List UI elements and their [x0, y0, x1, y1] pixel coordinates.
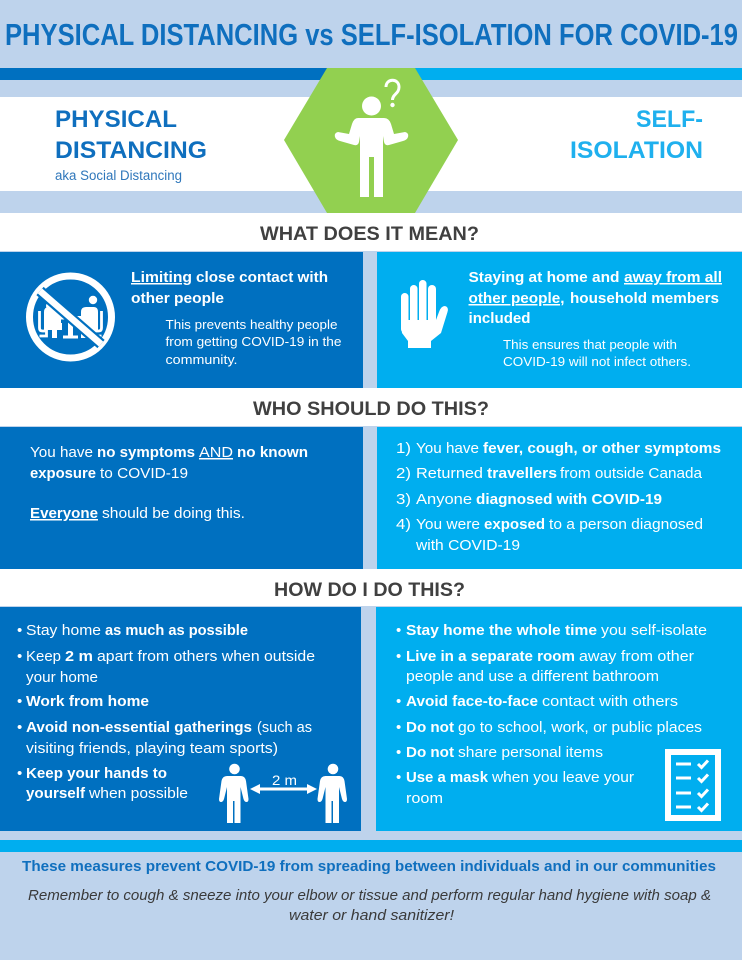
text: staying at home: away from all: [624, 269, 722, 286]
panel: who self-isolation: You were: [416, 516, 480, 533]
panel: physical distancing meaning: [0, 252, 363, 388]
text: staying at home: household members: [570, 290, 719, 307]
panel: who physical distancing: should be doing this.: [102, 505, 245, 522]
panel: how physical distancing: Keep your hands to: [26, 765, 167, 782]
panel: who self-isolation: to a person diagnosed: [549, 516, 703, 533]
text: staying at home: included: [468, 310, 530, 327]
panel: how self-isolation: Do not: [406, 744, 454, 761]
section heading band: what does it mean: WHAT DOES IT MEAN?: [260, 224, 479, 245]
panel: how physical distancing: •: [17, 622, 22, 639]
heading: physical distancing: DISTANCING: [55, 137, 207, 164]
panel: how physical distancing: •: [17, 648, 22, 665]
panel: who self-isolation: fever, cough, or other symptoms: [483, 440, 721, 457]
text: prevents healthy people: from getting COVID-19 in the: [166, 334, 342, 349]
text: staying at home: other people,: [468, 290, 564, 307]
panel: who physical distancing: [0, 427, 363, 569]
panel: who physical distancing: no symptoms: [97, 444, 195, 461]
text: limiting close contact: close contact with: [196, 269, 328, 286]
panel: who self-isolation: 3): [396, 491, 411, 508]
footer bar: [0, 840, 742, 852]
text: prevents healthy people: [166, 317, 342, 367]
text: prevents healthy people: This prevents healthy people: [166, 317, 338, 332]
panel: who physical distancing: to COVID-19: [100, 465, 188, 482]
panel: how self-isolation: contact with others: [542, 693, 678, 710]
panel: who self-isolation: with COVID-19: [415, 537, 520, 554]
icon: two people 2 m apart: 2 m: [272, 773, 297, 788]
panel: who self-isolation: exposed: [484, 516, 545, 533]
panel: how self-isolation: go to school, work, or public places: [458, 719, 702, 736]
heading: physical distancing: aka Social Distancing: [55, 168, 182, 183]
text: prevents healthy people: community.: [166, 352, 238, 367]
section heading band: how do i do this: HOW DO I DO THIS?: [274, 580, 465, 601]
panel: how physical distancing: Keep: [26, 648, 61, 665]
text: limiting close contact: [131, 269, 328, 307]
panel: how self-isolation: when you leave your: [491, 769, 634, 786]
heading: physical distancing: [55, 106, 207, 183]
panel: how self-isolation: •: [396, 769, 401, 786]
icon: no meeting: [30, 276, 112, 358]
panel: how self-isolation: •: [396, 648, 401, 665]
heading: self-isolation: SELF-: [636, 106, 703, 133]
panel: how self-isolation: •: [396, 744, 401, 761]
section heading band: who should do this: WHO SHOULD DO THIS?: [253, 399, 489, 420]
text: measures prevent spreading: These measures prevent COVID-19 from spreading between individuals and in our communities: [22, 858, 716, 875]
text: hygiene reminder: [28, 887, 711, 924]
text: staying at home: [468, 269, 722, 327]
panel: how self-isolation: Do not: [406, 719, 454, 736]
heading: physical distancing: PHYSICAL: [55, 106, 177, 133]
panel: how self-isolation: away from other: [579, 648, 694, 665]
panel: who physical distancing: Everyone: [30, 505, 98, 522]
panel: how self-isolation: Live in a separate room: [406, 648, 575, 665]
text: hygiene reminder: Remember to cough & sneeze into your elbow or tissue and perform regular hand hygiene with soap &: [28, 887, 711, 904]
panel: who physical distancing: no known: [237, 444, 308, 461]
text: limiting close contact: other people: [131, 290, 224, 307]
header bar: self-isolation colour: [400, 68, 742, 80]
icon: confused person in hexagon: [284, 68, 458, 213]
panel: who physical distancing: exposure: [30, 465, 96, 482]
panel: who self-isolation: Anyone: [416, 491, 472, 508]
text: limiting close contact: Limiting: [131, 269, 192, 286]
section heading band: how do i do this: [0, 569, 742, 606]
panel: how self-isolation: share personal items: [458, 744, 603, 761]
panel: how physical distancing: •: [17, 765, 22, 782]
panel: how physical distancing: [0, 607, 361, 831]
panel: how physical distancing: 2 m: [65, 648, 93, 665]
panel: self-isolation meaning: [377, 252, 742, 388]
text: staying at home: Staying at home and: [468, 269, 620, 286]
panel: how physical distancing: yourself: [26, 785, 86, 802]
panel: who self-isolation: from outside Canada: [560, 465, 703, 482]
panel: how self-isolation: Use a mask: [406, 769, 489, 786]
panel: how self-isolation: Avoid face-to-face: [406, 693, 538, 710]
panel: how physical distancing: (such as: [257, 719, 312, 736]
panel: who self-isolation: travellers: [487, 465, 557, 482]
panel: how self-isolation: room: [406, 790, 443, 807]
panel: who self-isolation: 4): [396, 516, 411, 533]
text: ensures people: COVID-19 will not infect others.: [503, 354, 691, 369]
heading: self-isolation: ISOLATION: [570, 137, 703, 164]
panel: who self-isolation: You have: [416, 440, 479, 457]
panel: how physical distancing: visiting friends, playing team sports): [26, 740, 278, 757]
panel: who self-isolation: [377, 427, 742, 569]
panel: how physical distancing: Work from home: [26, 693, 149, 710]
panel: who self-isolation: 1): [396, 440, 411, 457]
panel: how self-isolation: you self-isolate: [601, 622, 707, 639]
panel: how self-isolation: people and use a different bathroom: [406, 668, 659, 685]
panel: how physical distancing: •: [17, 693, 22, 710]
heading: self-isolation: [570, 106, 703, 164]
section heading band: what does it mean: [0, 213, 742, 251]
panel: how physical distancing: apart from others when outside: [97, 648, 315, 665]
panel: who self-isolation: 2): [396, 465, 411, 482]
panel: who physical distancing: AND: [199, 444, 233, 461]
panel: how self-isolation: •: [396, 622, 401, 639]
section heading band: who should do this: [0, 388, 742, 426]
text: ensures people: [503, 337, 691, 369]
panel: who self-isolation: Returned: [416, 465, 483, 482]
panel: how self-isolation: [376, 607, 742, 831]
panel: how self-isolation: Stay home the whole time: [406, 622, 597, 639]
text: hygiene reminder: water or hand sanitizer!: [289, 907, 455, 924]
panel: who physical distancing: You have: [30, 444, 93, 461]
icon: two people 2 m apart: [219, 764, 347, 823]
panel: how self-isolation: •: [396, 719, 401, 736]
panel: who self-isolation: diagnosed with COVID-19: [476, 491, 662, 508]
icon: checklist: [668, 752, 718, 818]
panel: how self-isolation: •: [396, 693, 401, 710]
header band: [0, 97, 742, 191]
panel: how physical distancing: when possible: [88, 785, 188, 802]
panel: how physical distancing: Stay home: [26, 622, 101, 639]
panel: how physical distancing: Avoid non-essential gatherings: [26, 719, 252, 736]
panel: how physical distancing: as much as possible: [105, 622, 248, 639]
icon: raised hand: [401, 280, 448, 348]
panel: how physical distancing: your home: [26, 669, 98, 686]
panel: how physical distancing: •: [17, 719, 22, 736]
text: ensures people: This ensures that people with: [503, 337, 677, 352]
header bar: physical distancing colour: [0, 68, 340, 80]
